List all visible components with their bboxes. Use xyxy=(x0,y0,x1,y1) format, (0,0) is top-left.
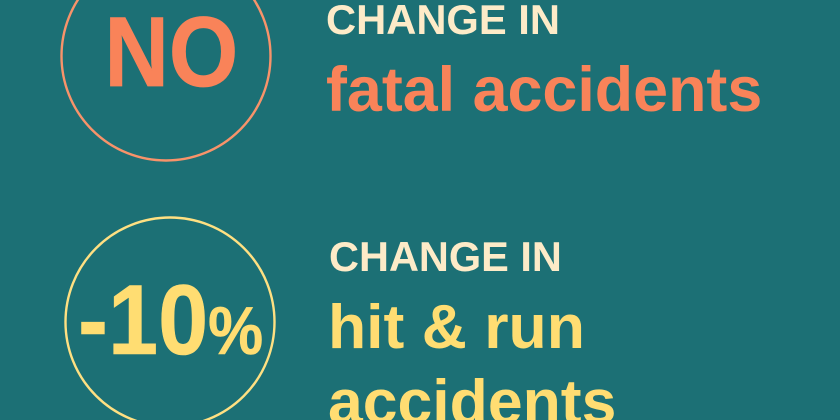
heading: hit and run accidents: hit & run xyxy=(328,292,585,362)
heading: fatal accidents: fatal accidents xyxy=(326,55,762,125)
circle badge: NO xyxy=(62,0,270,160)
stat: no change in fatal accidents xyxy=(62,0,762,160)
circle badge: -10%: -10% xyxy=(78,265,263,376)
stat: minus ten percent hit and run accidents xyxy=(66,218,616,420)
label: change in: CHANGE IN xyxy=(329,233,562,280)
circle badge: -10% xyxy=(66,218,274,420)
